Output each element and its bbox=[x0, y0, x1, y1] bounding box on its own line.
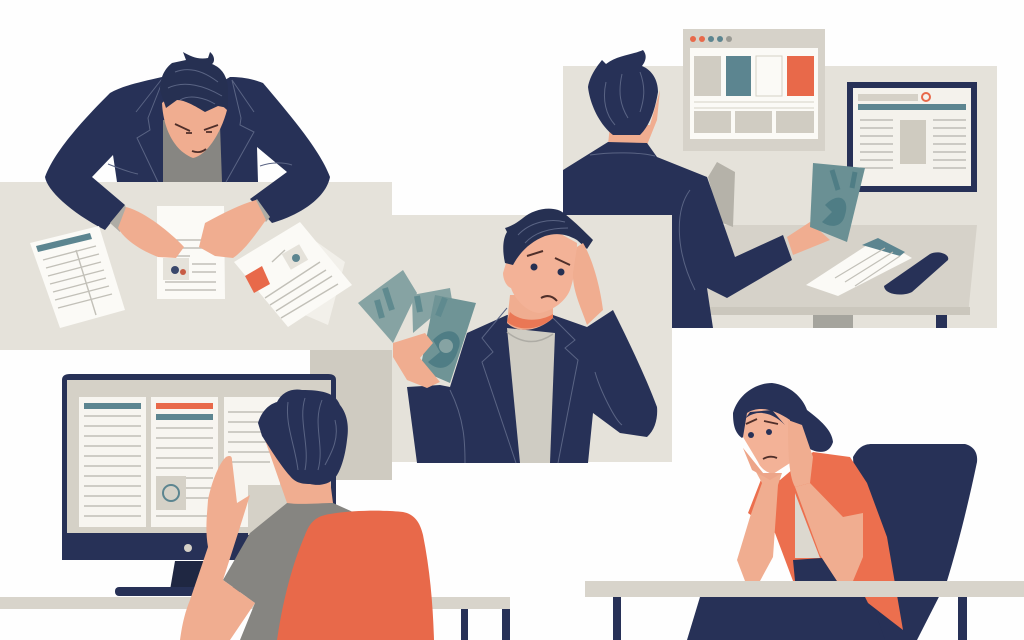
man with cash, hand on head bbox=[358, 209, 657, 463]
desk: bottom right bbox=[585, 581, 1024, 640]
hair back bbox=[733, 383, 833, 452]
neck bbox=[265, 440, 333, 504]
window: top right website panel bbox=[683, 29, 825, 151]
face bbox=[503, 225, 577, 313]
face bbox=[743, 409, 790, 474]
panel: top left desk bbox=[0, 182, 392, 350]
document: right stack bbox=[234, 222, 352, 327]
left arm bbox=[737, 448, 782, 581]
documents: left desk papers bbox=[30, 206, 352, 328]
right arm bbox=[795, 483, 863, 581]
hair bbox=[258, 390, 348, 485]
banknotes: behind man bbox=[708, 162, 735, 227]
jacket bbox=[563, 142, 792, 328]
desk: bottom left bbox=[0, 597, 510, 640]
shirt bbox=[795, 493, 820, 558]
hand on cheek bbox=[788, 420, 813, 487]
chair: navy bbox=[853, 444, 977, 640]
monitor: bottom left bbox=[62, 374, 336, 596]
hand on head bbox=[573, 243, 603, 325]
panel: centre backdrop bbox=[392, 215, 672, 462]
woman with head in hands bbox=[687, 383, 903, 640]
person from behind at monitor bbox=[180, 390, 434, 640]
panel: top right backdrop bbox=[563, 66, 997, 328]
panel: bottom left backdrop bbox=[310, 350, 392, 480]
document: left sheet bbox=[30, 226, 125, 328]
eyes bbox=[530, 264, 538, 270]
hands over centre sheet bbox=[110, 199, 270, 258]
jacket bbox=[748, 452, 903, 630]
hand bbox=[787, 222, 830, 255]
shirt bbox=[223, 503, 353, 640]
face bbox=[162, 90, 227, 158]
monitor: top right bbox=[847, 82, 977, 192]
figure: man leaning over desk bbox=[45, 52, 330, 230]
arm and raised hand bbox=[180, 456, 255, 640]
document: centre sheet bbox=[157, 206, 225, 299]
neck bbox=[507, 295, 553, 330]
waist bbox=[793, 558, 837, 581]
hair bbox=[160, 52, 228, 112]
hair bbox=[503, 209, 593, 265]
desk: top right bbox=[700, 225, 977, 328]
jacket bbox=[407, 310, 657, 463]
hand holding cash bbox=[393, 333, 440, 388]
banknotes: held bbox=[810, 163, 865, 242]
trousers bbox=[687, 597, 885, 640]
banknotes: fan bbox=[358, 270, 476, 383]
chair: orange bbox=[277, 511, 434, 640]
jacket bbox=[45, 77, 330, 230]
shirt bbox=[507, 328, 555, 463]
neck bbox=[608, 90, 660, 145]
man from behind holding cash bbox=[563, 50, 865, 328]
hair bbox=[588, 50, 658, 135]
